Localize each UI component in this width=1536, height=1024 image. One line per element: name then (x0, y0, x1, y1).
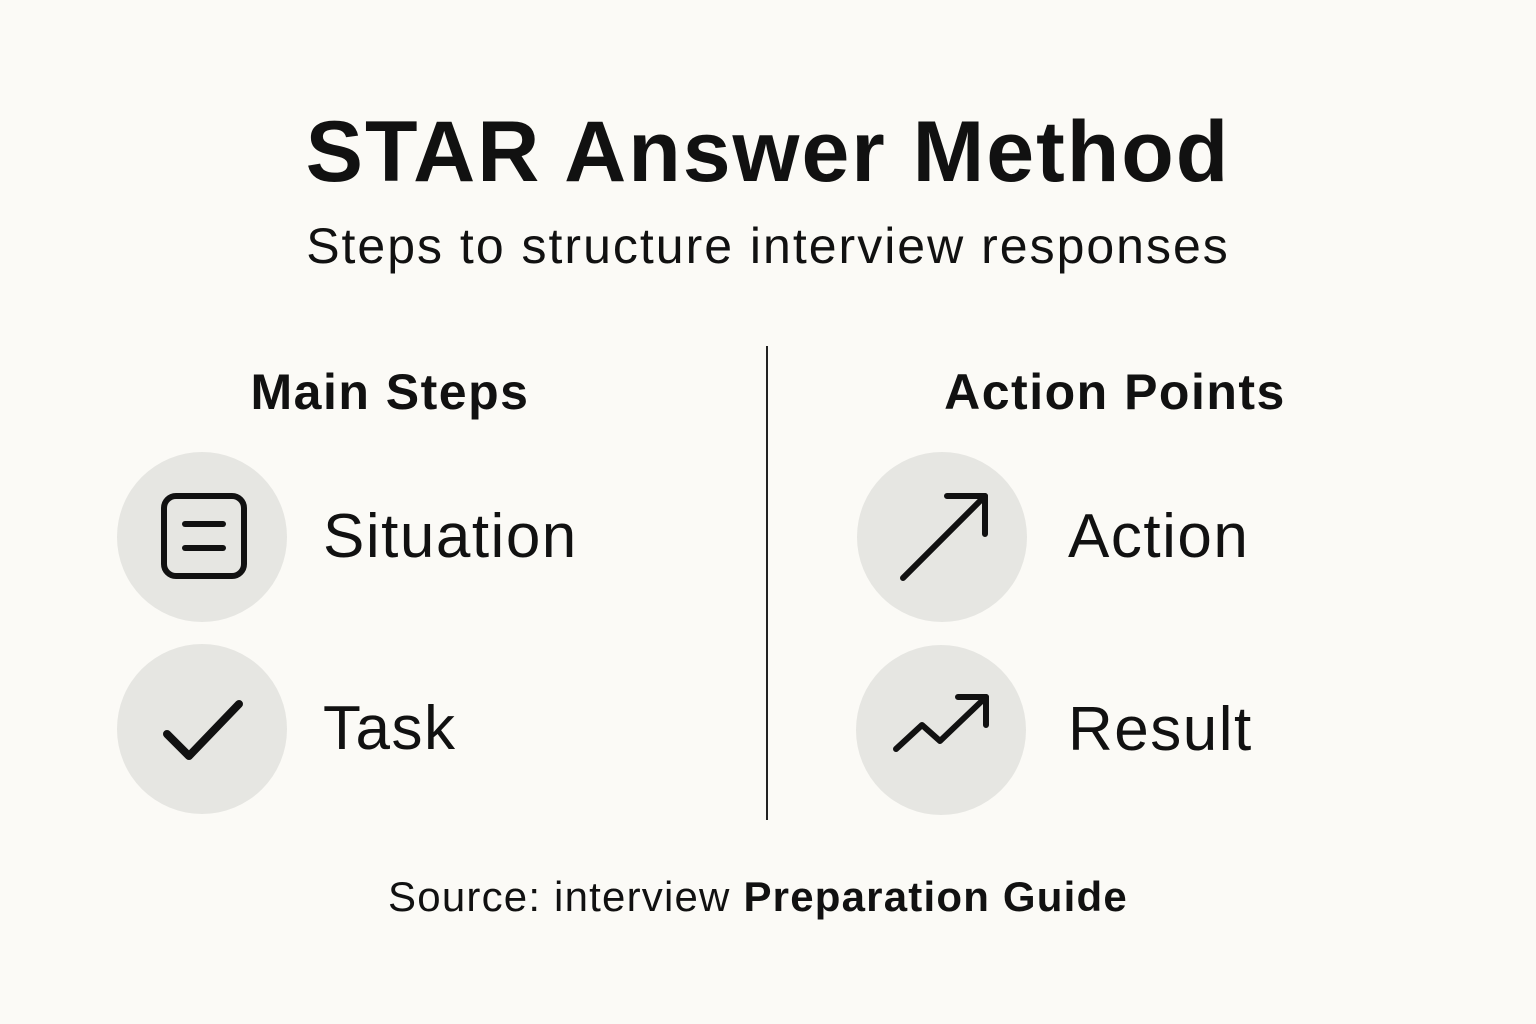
icon: situation (117, 452, 287, 622)
heading: action points: Action Points (944, 364, 1286, 420)
icon: trend (856, 645, 1026, 815)
item: result (856, 645, 1253, 815)
label: action: Action (1068, 502, 1249, 571)
divider (766, 346, 768, 820)
item: situation (117, 452, 578, 622)
source: Source: interview Preparation Guide (388, 873, 1128, 920)
label: situation: Situation (323, 502, 578, 571)
heading: main steps: Main Steps (251, 364, 529, 420)
subtitle: Steps to structure interview responses (306, 218, 1230, 274)
label: task: Task (323, 694, 456, 763)
title: STAR Answer Method (306, 104, 1230, 200)
item: action (857, 452, 1249, 622)
item: task (117, 644, 456, 814)
icon: check (117, 644, 287, 814)
label: result: Result (1068, 695, 1253, 764)
icon: arrow (857, 452, 1027, 622)
